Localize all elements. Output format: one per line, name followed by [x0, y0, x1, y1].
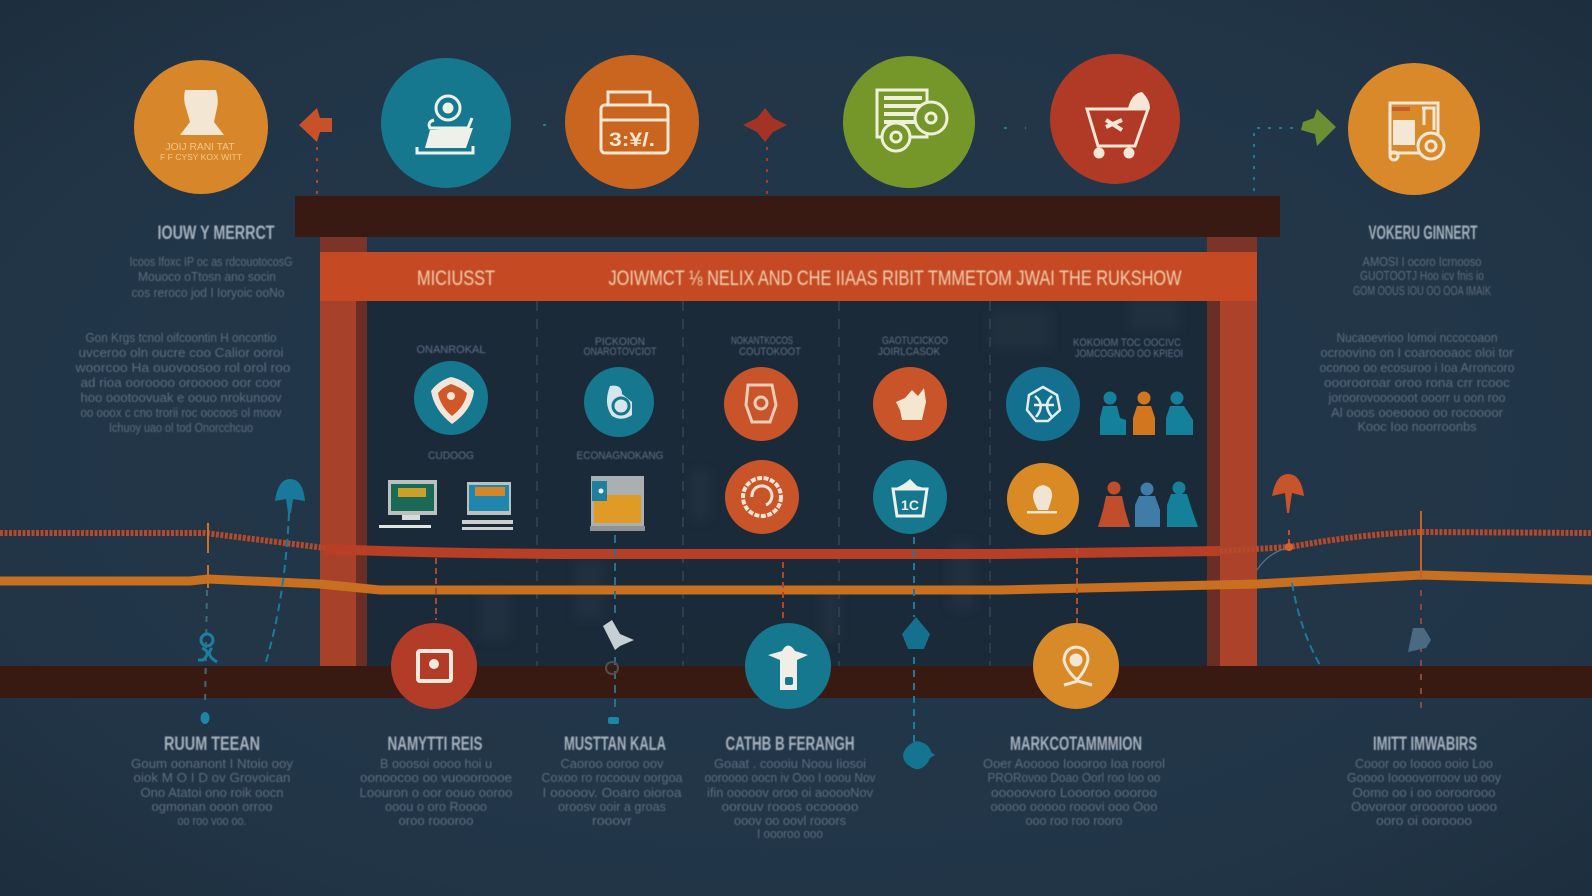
timeline lines — [0, 532, 1592, 590]
bottom column 5 text: Ooer Aooooo Ioooroo Ioa roorol — [983, 757, 1165, 771]
column label 2: ONAROTOVCIOT — [584, 346, 657, 358]
column label 3: NOKANTKOCOS — [731, 335, 793, 347]
bottom column 5 text: ooooovoro Loooroo oooroo — [991, 786, 1157, 800]
bucket label: 1C — [901, 497, 919, 513]
bottom column 1 text: oiok M O I D ov Grovoican — [134, 771, 291, 785]
top beam — [295, 196, 1280, 237]
icon: orange shield — [724, 367, 798, 441]
circle 6: orange report — [1348, 63, 1480, 195]
person teal — [1167, 482, 1198, 527]
marker: orange mushroom — [1272, 474, 1304, 513]
icon: document and gears — [877, 90, 947, 151]
column label 4: JOIRLCASOK — [878, 346, 941, 358]
circle 1: orange head — [134, 60, 268, 194]
icon: hat figure — [768, 646, 808, 690]
top right text block 2: Kooc Ioo noorroonbs — [1358, 420, 1476, 434]
bottom column 5 text — [983, 757, 1165, 828]
circle: red badge — [391, 623, 477, 709]
bottom column 4 text: ooov oo oovl rooors — [734, 814, 846, 828]
bottom beam — [0, 666, 1592, 698]
icon: teal network — [1006, 367, 1080, 441]
column label 5 — [1073, 337, 1183, 360]
icon: grey bird — [1408, 628, 1431, 652]
top right text block 2: oconoo oo ecosuroo i Ioa Arroncoro — [1320, 361, 1515, 375]
bottom column 1 text: oo roo voo oo. — [178, 814, 246, 828]
icon: teal tag — [608, 717, 619, 724]
circle caption: JOIJ RANI TAT — [166, 142, 234, 153]
circle 4: green documents — [843, 56, 975, 188]
bottom column 3 text — [542, 757, 683, 828]
circle: teal person — [745, 623, 831, 709]
bottom column 4 text: I oooroo ooo — [757, 827, 823, 841]
bottom column 3 text: rooovr — [592, 814, 632, 828]
banner title: JOIWMCT ⅛ NELIX AND CHE IIAAS RIBIT TMMETOM JWAI THE RUKSHOW — [608, 267, 1182, 290]
icon: teal camera — [584, 367, 654, 437]
bottom column 2 text — [360, 757, 513, 828]
icon: teal squiggle — [198, 634, 217, 662]
top right text block 1: GOM OOUS IOU OO OOA IMAIK — [1353, 284, 1491, 298]
bottom column 5 text: PRORovoo Doao Oorl roo Ioo oo — [988, 771, 1161, 785]
top right text block 2: Al ooos ooeoooo oo rocoooor — [1331, 406, 1503, 420]
bottom column 2 text: Loouron o oor oouo ooroo — [360, 786, 513, 800]
icon: small ring — [606, 662, 618, 674]
bottom column 3 heading: MUSTTAN KALA — [564, 734, 666, 755]
bottom column 4 text: oorouv rooos ocooooo — [722, 800, 859, 814]
bottom column 1 heading: RUUM TEEAN — [164, 734, 260, 755]
right pillar — [1207, 237, 1257, 667]
column label 6: CUDOOG — [428, 450, 474, 462]
person teal — [1100, 392, 1126, 435]
icon: monitor blue — [462, 482, 513, 530]
bottom column 3 text: Coxoo ro rocoouv oorgoa — [542, 771, 683, 785]
suitcase digits: 3:¥/. — [609, 130, 655, 151]
bottom column 3 text: Caoroo ooroo oov — [560, 757, 664, 771]
bottom column 1 text: ogmonan ooon orroo — [152, 800, 273, 814]
column label 2: PICKOION — [595, 336, 645, 348]
bottom column 2 text: oonoocoo oo vuoooroooe — [360, 771, 512, 785]
left pillar — [320, 237, 367, 667]
bottom column 5 text: ooo roo roo rooro — [1026, 814, 1123, 828]
circle 1: orange head: F F CYSY KOX WITT — [160, 153, 242, 162]
icon: gear machine — [417, 96, 473, 153]
bottom column 6 text: ooro oi ooroooo — [1376, 814, 1472, 828]
dotted connectors top — [317, 125, 1293, 195]
bottom column 5 text: ooooo ooooo rooovi ooo Ooo — [990, 800, 1158, 814]
orange line — [0, 575, 1592, 590]
icon: teal house marker — [902, 617, 930, 649]
arrow: left — [299, 108, 332, 142]
icon: orange spiral — [725, 460, 799, 534]
connector lines — [205, 511, 1421, 743]
person blue — [1135, 482, 1160, 527]
top left heading: IOUW Y MERRCT — [158, 223, 275, 244]
top left text block 2: hoo oootoovuak e oouo nrokunoov — [80, 391, 282, 405]
top left text block 2: ad rioa ooroooo orooooo oor coor — [80, 376, 282, 390]
bottom column 4 text — [704, 757, 876, 841]
person red — [1098, 482, 1130, 527]
bottom column 1 text: Goum oonanont I Ntoio ooy — [131, 757, 294, 771]
bottom column 2 heading: NAMYTTI REIS — [388, 734, 482, 755]
stage backdrop — [366, 237, 1208, 667]
bottom column 6 text — [1347, 757, 1502, 828]
column label 5: JOMCOGNOO OO KPIEOI — [1075, 348, 1183, 360]
icon: teal drop left — [200, 712, 210, 724]
circle 2: teal gear — [381, 58, 511, 188]
top right text block 2 — [1320, 331, 1515, 434]
bottom column 4 text: Goaat . coooiu Noou Iiosoi — [714, 757, 866, 771]
top left text block 2: woorcoo Ha ouovoosoo rol orol roo — [74, 361, 291, 375]
icon: monitor green — [379, 480, 437, 528]
circle 5: red cart — [1050, 54, 1180, 184]
circle: orange pin — [1033, 623, 1119, 709]
banner — [320, 252, 1257, 301]
icon: teal blob — [903, 741, 935, 769]
column label 4 — [878, 335, 948, 358]
icon: teal bucket — [873, 460, 947, 534]
top left text block 2: uvceroo oln oucre coo Calior ooroi — [78, 346, 284, 360]
top left text block 2: oo ooox c cno trorii roc oocoos ol moov — [80, 406, 282, 420]
bottom column 1 text: Ono Atatoi ono roik oocn — [140, 786, 284, 800]
top right text block 2: ooorooroar oroo rona crr rcooc — [1324, 376, 1510, 390]
column label 1: ONANROKAL — [416, 344, 486, 356]
bottom column 2 text: ooou o oro Roooo — [385, 800, 487, 814]
marker: orange node — [1285, 543, 1293, 551]
column label 7: ECONAGNOKANG — [576, 450, 664, 462]
top left text block 2: Ichuoy uao ol tod Onorcchcuo — [109, 421, 253, 435]
top left text block 1 — [130, 255, 292, 300]
red line — [0, 533, 325, 548]
icon: head — [180, 90, 224, 135]
bottom column 3 text: oroosv ooir a groas — [558, 800, 666, 814]
icon: laptop — [590, 476, 645, 531]
arrow: right — [1301, 109, 1336, 146]
top left text block 1: Icoos Ifoxc IP oc as rdcouotocosG — [130, 255, 292, 269]
people group: red blue teal — [1098, 482, 1198, 527]
bottom column 6 heading: IMITT IMWABIRS — [1373, 734, 1477, 755]
column label 5: KOKOIOM TOC OOCIVC — [1073, 337, 1181, 349]
bottom column 5 heading: MARKCOTAMMMION — [1010, 734, 1142, 755]
circle 3: orange suitcase — [565, 55, 699, 189]
top right heading: VOKERU GINNERT — [1368, 223, 1478, 244]
column label 3: COUTOKOOT — [739, 346, 801, 358]
people group: teal orange teal — [1100, 392, 1193, 435]
bottom column 4 text: ooroooo oocn iv Ooo I ooou Nov — [704, 771, 876, 785]
bottom column 4 heading: CATHB B FERANGH — [726, 734, 854, 755]
icon: location shield — [414, 361, 488, 435]
icon: framed dot — [418, 651, 451, 681]
bottom column 6 text: Cooor oo Ioooo ooio Loo — [1355, 757, 1493, 771]
icon: pin — [1064, 647, 1092, 685]
column label 4: GAOTUCICKOO — [882, 335, 948, 347]
marker: teal mushroom — [275, 479, 305, 513]
bottom column 6 text: Goooo Ioooovorroov uo ooy — [1347, 771, 1502, 785]
top right text block 2: Nucaoevrioo Iomoi nccocoaon — [1336, 331, 1498, 345]
top right text block 2: joroorovoooooot ooorr u oon roo — [1328, 391, 1506, 405]
top right text block 1: GUOTOOTJ Hoo icv fnis io — [1360, 269, 1484, 283]
top right text block 2: ocroovino on I coaroooaoc oloi tor — [1320, 346, 1514, 360]
column label 2 — [584, 336, 657, 358]
top left text block 1: cos reroco jod I Ioryoic ooNo — [132, 286, 285, 300]
bottom column 2 text: oroo roooroo — [398, 814, 474, 828]
column label 3 — [731, 335, 801, 358]
top left text block 1: Mouoco oTtosn ano socin — [138, 270, 276, 284]
icon: report with coin — [1390, 103, 1444, 160]
bottom column 6 text: Oovoroor oroooroo uooo — [1351, 800, 1497, 814]
person orange — [1133, 392, 1155, 435]
bottom column 1 text — [131, 757, 294, 828]
icon: pale bird — [603, 620, 634, 650]
banner label: MICIUSST — [417, 267, 495, 290]
icon: orange bulb — [1007, 463, 1079, 535]
person teal — [1166, 392, 1193, 435]
icon: cart — [1087, 92, 1150, 157]
top left text block 2: Gon Krgs tcnol oifcoontin H oncontio — [86, 331, 277, 345]
icon: orange splash — [873, 367, 947, 441]
bottom column 6 text: Oomo oo i oo ooroorooo — [1352, 786, 1496, 800]
bottom column 3 text: I ooooov. Ooaro oioroa — [542, 786, 682, 800]
arrow: diamond — [743, 108, 787, 142]
top left text block 2 — [74, 331, 291, 435]
top right text block 1: AMOSI I ocoro Icrnooso — [1362, 255, 1482, 269]
bottom column 4 text: ifin ooooov oroo oi aooooNov — [707, 786, 874, 800]
panel: central stage — [295, 196, 1280, 667]
bottom column 2 text: B ooosoi oooo hoi u — [380, 757, 492, 771]
top right text block 1 — [1353, 255, 1491, 298]
